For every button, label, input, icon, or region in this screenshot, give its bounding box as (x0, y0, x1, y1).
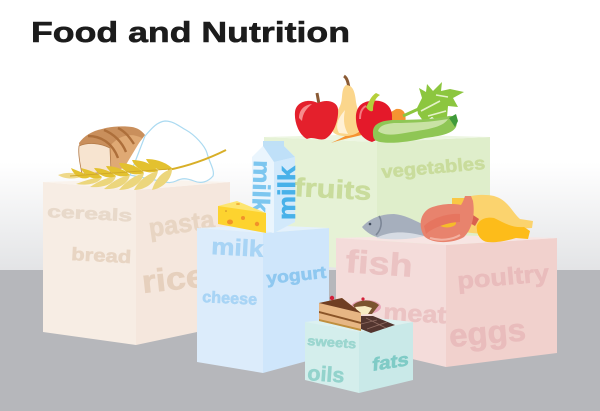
icon: roast chicken (452, 195, 533, 242)
label: cheese: cheese (202, 289, 258, 309)
label: milk on right side: milk (274, 165, 301, 220)
icon: wheat ear (58, 150, 226, 190)
icon: flour bag (130, 121, 213, 183)
label: oils: oils (307, 362, 345, 388)
icon: fish (362, 214, 424, 239)
icon: carrot (331, 109, 406, 143)
icon: cheese wedge (218, 201, 266, 233)
label: pasta: pasta (147, 204, 217, 243)
box: cereals (43, 179, 230, 345)
icon: red bell pepper (356, 93, 392, 142)
label: vegetables: vegetables (381, 153, 486, 182)
icon: pear (332, 76, 361, 136)
icon: cupcake (351, 297, 381, 315)
label: bread: bread (71, 244, 132, 267)
label: meat: meat (383, 299, 447, 329)
icon: leafy greens (403, 82, 464, 123)
icon: apple (295, 93, 338, 139)
label: fruits: fruits (294, 172, 372, 206)
label: fats: fats (372, 349, 409, 375)
box: meat, fish and eggs (336, 235, 557, 367)
label: milk: milk (211, 233, 264, 262)
label: fish: fish (345, 243, 414, 284)
label: rice: rice (140, 257, 207, 300)
icon: zucchini (373, 114, 458, 143)
icon: cake slice (319, 296, 361, 331)
label: milk on left side: milk (246, 160, 275, 213)
label: eggs: eggs (447, 311, 527, 354)
icon: sausage ring (421, 196, 479, 242)
box: sweets, fats and oils (305, 316, 413, 393)
label: poultry: poultry (456, 260, 551, 295)
box: fruits and vegetables (264, 134, 490, 272)
title: Food and Nutrition (31, 17, 350, 49)
floor (0, 270, 600, 411)
label: sweets: sweets (307, 333, 357, 351)
label: cereals: cereals (47, 202, 133, 225)
icon: chocolate bar (361, 316, 395, 333)
label: yogurt: yogurt (265, 263, 327, 288)
icon: loaf of bread (79, 126, 145, 174)
box: dairy (197, 225, 329, 373)
background wall (0, 0, 600, 270)
icon: milk carton (246, 141, 301, 233)
